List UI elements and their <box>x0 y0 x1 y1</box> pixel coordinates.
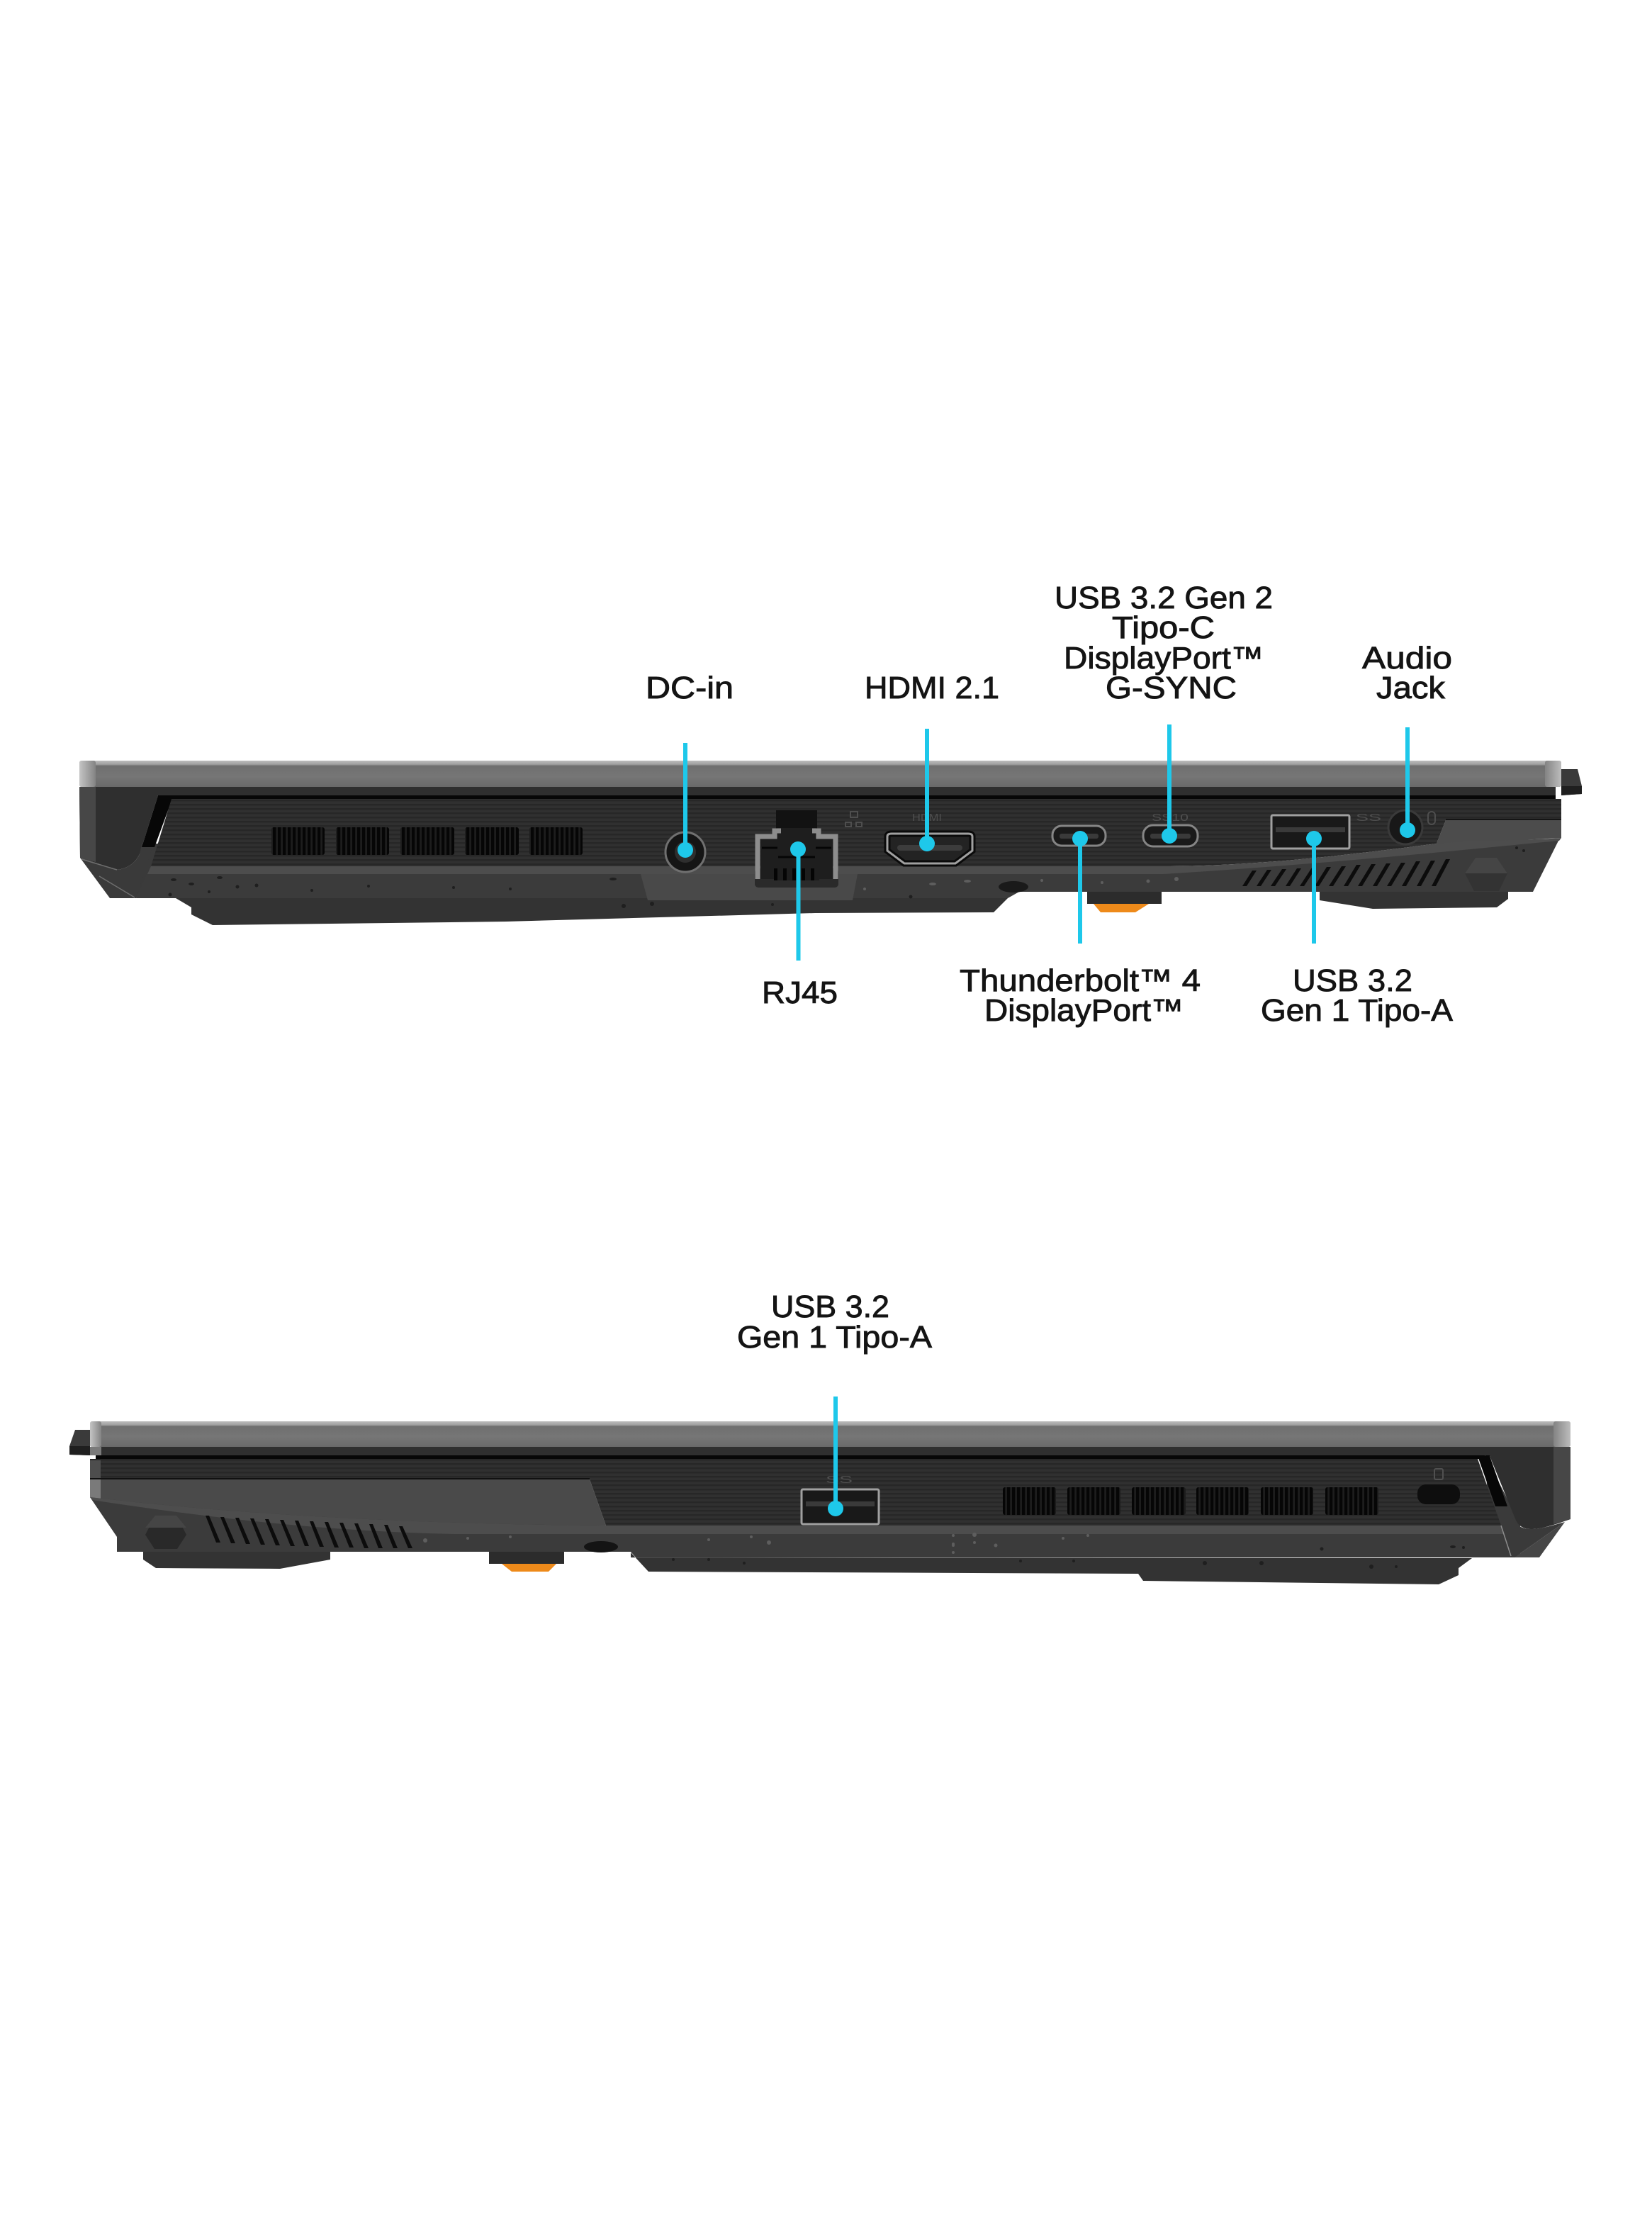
Ethernet mark <box>845 812 862 827</box>
black slit <box>96 1455 1490 1459</box>
hinge bump <box>69 1430 90 1455</box>
label: USB 3.2 Gen 2 group: USB 3.2 Gen 2 <box>1055 581 1273 615</box>
hex screw <box>145 1516 186 1549</box>
Thunderbolt port <box>1052 826 1106 846</box>
connector: HDMI <box>919 729 935 851</box>
left ribs <box>90 1460 101 1478</box>
label: USB 3.2 Gen 1 Tipo-A left: Gen 1 Tipo-A <box>737 1320 933 1355</box>
lighter lip <box>90 1497 1504 1534</box>
panel: right side of laptop <box>79 761 1582 925</box>
label: Audio Jack: Audio <box>1362 641 1452 676</box>
grey right panel <box>1437 820 1561 844</box>
label: Audio Jack: Jack <box>1376 671 1446 705</box>
lighter lip <box>147 838 1561 874</box>
connector: DC-in <box>678 743 693 858</box>
grey wing panel <box>90 1479 606 1526</box>
label: Thunderbolt 4 DisplayPort: DisplayPort™ <box>984 993 1184 1028</box>
vents <box>271 827 583 855</box>
SS10 mark: SS10 <box>1152 812 1189 824</box>
right side cap <box>1490 1447 1570 1529</box>
label: USB 3.2 Gen 1 Tipo-A left: USB 3.2 <box>771 1289 889 1324</box>
exhaust slats <box>206 1516 412 1548</box>
SS mark: SS <box>826 1474 853 1486</box>
speckles <box>169 846 1525 908</box>
light speckles <box>423 1533 1089 1554</box>
label: HDMI 2.1: HDMI 2.1 <box>865 671 999 705</box>
connector: USB-A right <box>1306 831 1322 944</box>
striped front panel <box>151 799 1561 866</box>
corner facets <box>1495 1506 1565 1557</box>
lid hinge band <box>96 1447 1492 1455</box>
label: USB 3.2 Gen 1 Tipo-A left <box>737 1289 933 1355</box>
SS mark: SS <box>1356 812 1381 824</box>
speckled lower base <box>136 839 1559 898</box>
black slit right <box>1478 1456 1507 1506</box>
label: USB 3.2 Gen 1 Tipo-A right: Gen 1 Tipo-A <box>1261 993 1454 1028</box>
connector: USB-A left <box>828 1397 843 1516</box>
hex screw <box>1465 858 1507 891</box>
vents <box>1003 1487 1378 1515</box>
orange rubber foot <box>1087 892 1162 912</box>
small notch <box>999 881 1028 892</box>
connector: Thunderbolt <box>1072 831 1088 944</box>
laptop lid <box>90 1421 1570 1447</box>
DC-in jack <box>665 832 705 872</box>
label: USB 3.2 Gen 2 group: DisplayPort™ <box>1064 641 1264 676</box>
hinge bump <box>1561 769 1582 795</box>
left corner facet <box>80 847 152 898</box>
label: DC-in: DC-in <box>646 671 734 705</box>
light speckles <box>863 877 1179 890</box>
corner backing <box>1485 1455 1520 1557</box>
right foot <box>1320 892 1508 909</box>
black seam <box>90 1478 590 1479</box>
label: USB 3.2 Gen 2 group <box>1055 581 1273 705</box>
laptop lid <box>79 761 1561 787</box>
panel: left side of laptop <box>69 1421 1570 1584</box>
left foot <box>143 1552 330 1569</box>
black slit <box>142 795 1556 847</box>
USB-C port <box>1143 825 1198 846</box>
label: USB 3.2 Gen 1 Tipo-A right <box>1261 963 1454 1028</box>
lower lip <box>631 1552 1472 1584</box>
audio jack <box>1388 810 1435 844</box>
dark seam <box>1446 819 1561 820</box>
dark speckles <box>672 1545 1465 1569</box>
connector: audio <box>1400 727 1415 838</box>
lighter port tray <box>641 874 858 900</box>
Kensington lock slot <box>1417 1469 1460 1504</box>
grey end strip <box>90 1447 101 1455</box>
label: USB 3.2 Gen 2 group: Tipo-C <box>1112 610 1215 645</box>
label: Thunderbolt 4 DisplayPort <box>960 963 1201 1028</box>
HDMI port <box>887 834 972 863</box>
label: Thunderbolt 4 DisplayPort: Thunderbolt™ 4 <box>960 963 1201 998</box>
lower lip <box>176 898 1008 925</box>
striped front panel <box>90 1459 1501 1526</box>
corner backing <box>131 844 162 898</box>
connector: RJ45 <box>790 841 806 961</box>
label: RJ45: RJ45 <box>762 975 838 1010</box>
orange rubber foot <box>489 1552 564 1572</box>
label: USB 3.2 Gen 1 Tipo-A right: USB 3.2 <box>1293 963 1412 998</box>
USB-A port <box>802 1489 879 1524</box>
connector: USB-C <box>1162 724 1177 844</box>
cable notch <box>584 1541 618 1552</box>
left side cap and hinge band <box>79 787 1556 870</box>
label: USB 3.2 Gen 2 group: G-SYNC <box>1106 671 1237 705</box>
exhaust slats <box>1242 859 1450 886</box>
laptop base body <box>90 1497 1511 1557</box>
RJ45 port <box>755 810 838 888</box>
USB-A port <box>1271 815 1349 849</box>
label: Audio Jack <box>1362 641 1452 705</box>
HDMI mark: HDMI <box>912 812 942 824</box>
